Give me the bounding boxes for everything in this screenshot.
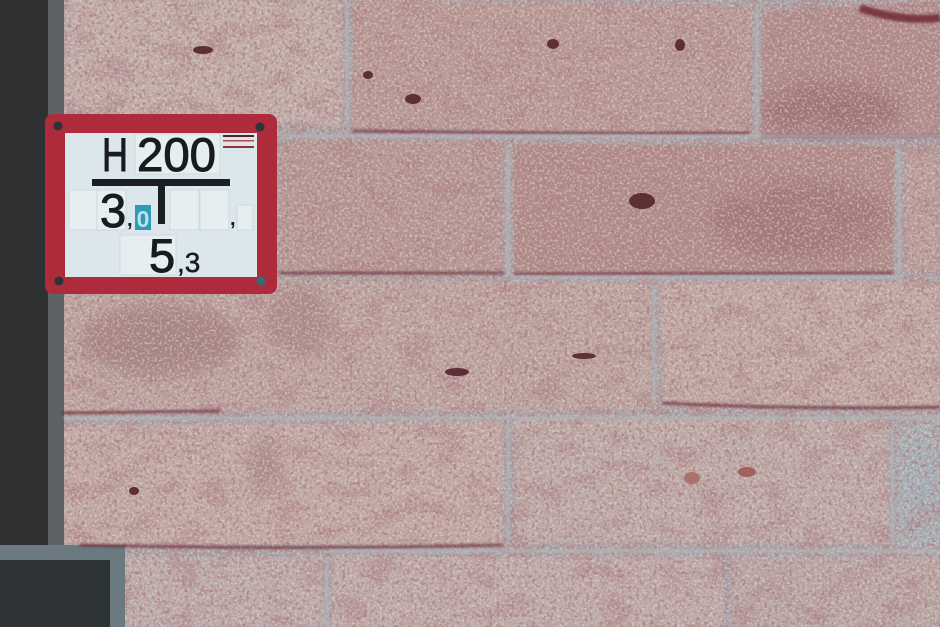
T-shaped pipe symbol xyxy=(92,179,230,224)
blue tile with digit 0: 0 xyxy=(137,206,149,232)
sign red frame xyxy=(45,114,277,294)
large pits xyxy=(129,39,756,495)
sign white panel xyxy=(65,133,257,277)
distance digit 5: 5 xyxy=(149,229,175,282)
diameter digit 3: 3 xyxy=(100,184,126,237)
sign label tiles xyxy=(69,134,253,275)
distance decimal: ,3 xyxy=(177,247,200,278)
second comma: , xyxy=(230,208,236,230)
comma: , xyxy=(127,209,133,231)
sign screws xyxy=(54,122,266,286)
sign text: H200 xyxy=(102,128,216,181)
dark stone column xyxy=(0,0,125,627)
hydrant sign xyxy=(45,114,277,294)
colour stripes xyxy=(223,135,254,148)
sign text: H200: 200 xyxy=(137,128,216,181)
stone stains xyxy=(80,82,940,540)
sign text: H200: H xyxy=(102,128,128,181)
